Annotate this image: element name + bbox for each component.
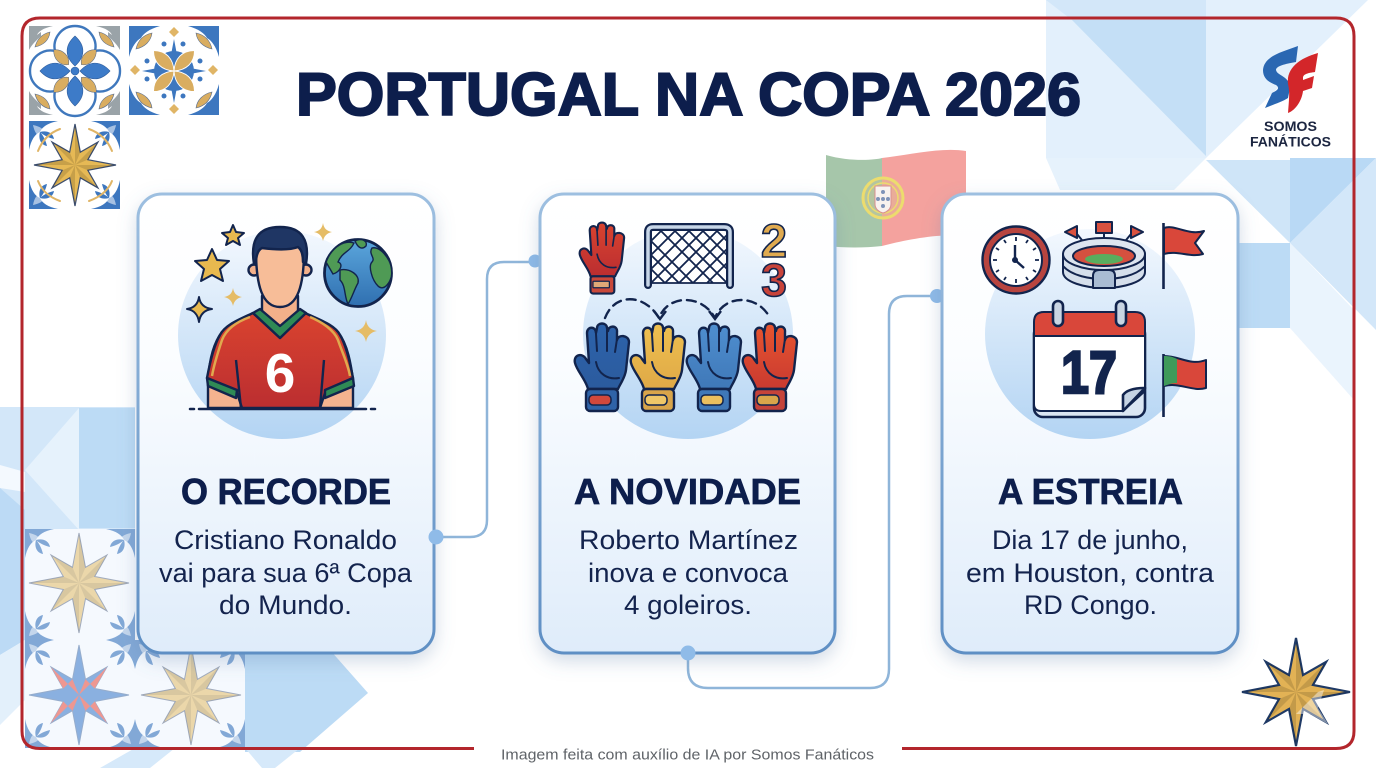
icon: stadium [1063, 222, 1145, 288]
faded tiles with compass stars [25, 529, 245, 748]
body text: do Mundo. [219, 590, 352, 620]
numbers 2 and 3 [761, 214, 787, 306]
title: PORTUGAL NA COPA 2026 [296, 61, 1081, 128]
tile backing: faded tiles [25, 529, 245, 748]
numbers 2 and 3: 3 [761, 254, 787, 306]
icon: clock [982, 226, 1050, 294]
body text: Dia 17 de junho, [992, 525, 1188, 555]
backdrop disc [985, 229, 1195, 439]
panel: A Estreia [942, 194, 1238, 653]
body text: em Houston, contra [966, 558, 1215, 588]
body text: 4 goleiros. [624, 590, 752, 620]
date number 17: 17 [1061, 339, 1117, 406]
icon: goal with net [648, 227, 730, 285]
heading: A NOVIDADE [574, 471, 801, 512]
logo: Somos Fanáticos [1250, 46, 1331, 150]
body text: vai para sua 6ª Copa [159, 558, 413, 588]
icon: compass star bottom right [1242, 638, 1350, 746]
baseline [190, 408, 375, 410]
dashed swap arcs [605, 299, 770, 318]
heading: O RECORDE [181, 471, 391, 512]
body text [579, 525, 798, 620]
faded Portuguese flag [826, 150, 966, 248]
body text: Cristiano Ronaldo [174, 525, 397, 555]
tile: gold compass star [29, 121, 120, 209]
numbers 2 and 3: 2 [761, 214, 787, 267]
icon: stars [187, 225, 244, 322]
backdrop disc [583, 229, 793, 439]
panel: A Novidade [540, 194, 835, 660]
icon: red glove [580, 223, 624, 294]
connector dot on card 1 [428, 530, 444, 544]
icon: globe [324, 240, 392, 306]
background geometric pattern: top right [1046, 0, 1376, 400]
logo: Somos Fanáticos: SOMOS [1264, 118, 1317, 134]
connector: card 1 to card 2 [436, 254, 542, 537]
connector dot [680, 646, 696, 660]
icon: gold sparkles [224, 223, 377, 342]
body text [966, 525, 1215, 620]
tile: quatrefoil [29, 26, 120, 116]
icon: red flag [1164, 223, 1204, 289]
panel: O Recorde [138, 194, 434, 653]
connector: card 2 to card 3 [688, 289, 944, 688]
body text: RD Congo. [1024, 590, 1157, 620]
background geometric pattern: bottom left [0, 407, 368, 768]
tile: blue star with gold petals [129, 26, 219, 115]
number 6: 6 [265, 342, 295, 404]
footer credit: Imagem feita com auxílio de IA por Somos Fanáticos [501, 746, 874, 764]
icon: calendar [1034, 301, 1145, 417]
icon: four gloves [575, 324, 797, 411]
icon: Portuguese flag pennant [1164, 354, 1206, 417]
icon: player in number 6 jersey [207, 227, 354, 408]
arrowheads [654, 311, 721, 319]
body text: Roberto Martínez [579, 525, 798, 555]
body text [159, 525, 413, 620]
logo: Somos Fanáticos: FANÁTICOS [1250, 134, 1331, 150]
heading: A ESTREIA [998, 471, 1183, 512]
backdrop disc [178, 231, 386, 439]
body text: inova e convoca [588, 558, 789, 588]
